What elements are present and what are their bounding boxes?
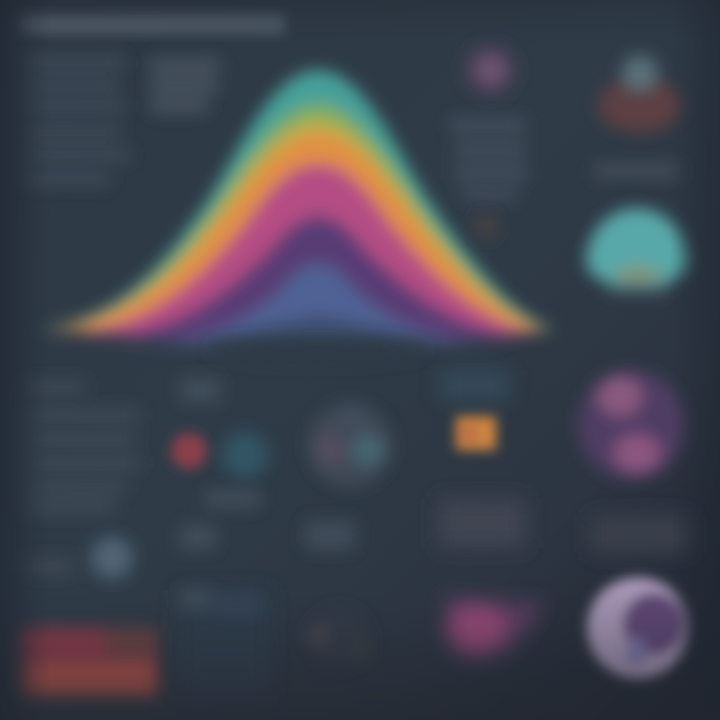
layer: yellow [44,120,550,330]
layer: purple [110,216,525,338]
icon: pink circle badge [464,44,516,96]
text block: right column [450,118,527,200]
icon: pink wing [445,598,545,660]
panel: column two [171,378,270,695]
icon: purple ring [578,371,686,479]
text block: column four [438,370,526,548]
title: Bell curve overview [24,17,162,34]
icon: central ring [308,403,392,487]
text block: upper left [25,55,130,186]
icon: top-right gauge [598,55,682,133]
layer: lower blue fade [120,314,515,346]
layer: blue [165,264,470,342]
layer: green [40,104,554,330]
bell curve chart [36,70,558,346]
callout: red box [20,628,158,696]
icon: teal dome [586,208,688,294]
layer: teal [36,70,558,330]
layer: orange [46,134,548,330]
icon: orange square [456,416,496,450]
base shadow under curve [208,336,428,364]
small label and teal icon [25,537,133,579]
panel background [178,590,270,695]
text block: ring caption [590,515,690,553]
icon: centre bottom circle [307,608,371,668]
icon: red dot [171,433,207,469]
title [20,14,285,34]
text: gauge caption [595,162,680,180]
icon: small amber mark [474,214,498,238]
icon: teal dot [222,432,268,478]
text block: lower left [25,380,140,514]
icon: lilac donut [587,577,689,679]
text lines [180,378,260,614]
text block: centre [305,520,355,550]
layer: magenta [70,164,540,334]
text block: upper middle [150,58,220,113]
